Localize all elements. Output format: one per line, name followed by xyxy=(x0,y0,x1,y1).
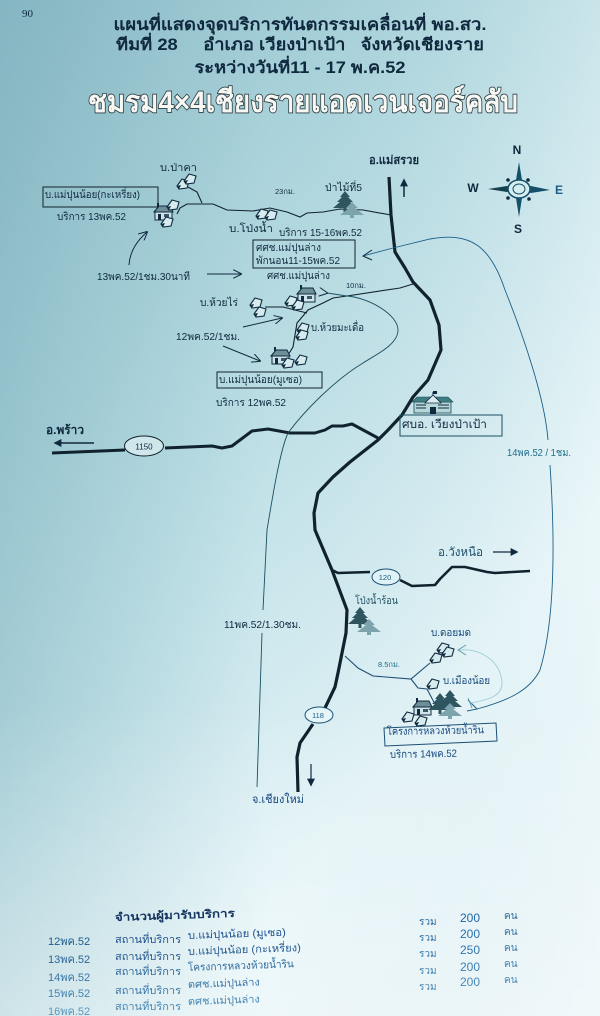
map labels: 12พค.52/1ชม. xyxy=(176,331,240,343)
road sign 1150: 1150 xyxy=(135,442,153,452)
route arrow to Mae Pun Lang xyxy=(207,273,241,275)
table service label: สถานที่บริการ xyxy=(115,983,181,997)
direction arrow east xyxy=(493,551,517,553)
map labels: อ.แม่สรวย xyxy=(369,153,419,167)
table unit: คน xyxy=(504,943,518,954)
table service places: ตศช.แม่ปุนล่าง xyxy=(188,993,260,1008)
table totals label: รวม xyxy=(419,949,437,960)
compass rose xyxy=(467,143,563,236)
title: ทีมที่ 28 อำเภอ เวียงป่าเป้า จังหวัดเชียงราย xyxy=(116,32,484,54)
table service places xyxy=(188,927,301,1008)
box: Mae Pun Noi Karen xyxy=(43,187,158,207)
map labels: 10กม. xyxy=(346,281,366,290)
box: Huay Nam Rin project xyxy=(384,723,497,746)
road 1150 xyxy=(52,424,378,453)
table totals values: 200 xyxy=(460,927,480,941)
icons: Huay Nam Rin project xyxy=(402,690,462,726)
icons: Huay Ma Duea village xyxy=(296,323,309,340)
compass rose: N xyxy=(513,143,521,157)
compass rose: S xyxy=(514,222,522,236)
icons: Doi Mot village xyxy=(430,643,454,663)
map labels: บ.แม่ปุนน้อย(มูเซอ) xyxy=(219,374,302,386)
map labels: อ.พร้าว xyxy=(46,423,84,437)
map labels: บ.โป่งน้ำ xyxy=(229,221,273,235)
map labels: ศบอ. เวียงป่าเป้า xyxy=(402,418,487,431)
table totals label xyxy=(419,917,437,993)
map labels: อ.วังหนือ xyxy=(438,545,483,559)
table unit: คน xyxy=(504,927,518,938)
route line 11 May xyxy=(257,293,398,787)
table totals label: รวม xyxy=(419,917,437,928)
compass rose: W xyxy=(467,181,479,195)
box: Wiang Pa Pao hospital xyxy=(400,415,502,436)
map labels: 14พค.52 / 1ชม. xyxy=(507,448,571,459)
table service places: บ.แม่ปุนน้อย (มูเซอ) xyxy=(188,927,286,942)
icons: Huay Rai village xyxy=(250,298,266,317)
table service label: สถานที่บริการ xyxy=(115,932,181,946)
southern feeder road xyxy=(345,656,437,708)
table totals values: 200 xyxy=(460,975,480,989)
title: แผนที่แสดงจุดบริการทันตกรรมเคลื่อนที่ พอ.สว. xyxy=(114,12,486,35)
map labels xyxy=(45,153,571,806)
road sign 120: 120 xyxy=(379,573,391,582)
route arrow to Muser village xyxy=(223,346,260,361)
road sign 118: 118 xyxy=(312,711,324,720)
map labels: บริการ 13พค.52 xyxy=(57,211,126,223)
table totals values: 250 xyxy=(460,943,480,957)
table dates: 15พค.52 xyxy=(48,988,90,1000)
direction arrow west xyxy=(55,442,94,444)
icon: Mueang Noi village xyxy=(427,679,439,689)
northern feeder road xyxy=(177,187,391,217)
table totals label: รวม xyxy=(419,982,437,993)
icons: Mae Pun Noi Muser village xyxy=(271,347,307,368)
table unit: คน xyxy=(504,975,518,986)
faint arrowheads xyxy=(458,645,472,708)
direction arrow south xyxy=(310,764,312,785)
road sign 1150 xyxy=(124,436,164,456)
table dates: 14พค.52 xyxy=(48,972,90,984)
table service places: บ.แม่ปุนน้อย (กะเหรี่ยง) xyxy=(188,940,301,958)
map labels: บ.ห้วยมะเดื่อ xyxy=(311,320,364,334)
table unit: คน xyxy=(504,959,518,970)
map labels: 8.5กม. xyxy=(378,660,400,669)
map labels: 11พค.52/1.30ชม. xyxy=(224,619,301,631)
page number: 90 xyxy=(22,8,34,20)
table totals values: 200 xyxy=(460,911,480,925)
map labels: ศศช.แม่ปุนล่าง xyxy=(256,242,321,254)
arrowhead at Huay Nam Rin xyxy=(467,700,477,711)
compass rose: E xyxy=(555,183,563,197)
route line 14 May xyxy=(363,237,553,709)
road sign 118 xyxy=(305,707,333,723)
main highway xyxy=(297,177,441,792)
map labels: บริการ 14พค.52 xyxy=(390,748,457,761)
table service places: ตศช.แม่ปุนล่าง xyxy=(188,976,260,991)
banner: club name: ชมรม4×4เชียงรายแอดเวนเจอร์คลับ xyxy=(88,85,518,119)
map labels: 23กม. xyxy=(275,187,295,196)
map labels: โครงการหลวงห้วยน้ำริน xyxy=(387,722,484,738)
map labels: ป่าไม้ที่5 xyxy=(325,180,362,194)
table totals label: รวม xyxy=(419,933,437,944)
map labels: โป่งน้ำร้อน xyxy=(355,593,398,607)
icon: hospital building xyxy=(412,391,453,414)
table service label: สถานที่บริการ xyxy=(115,999,181,1013)
route arrow to Karen village xyxy=(129,232,147,265)
table service label: สถานที่บริการ xyxy=(115,949,181,963)
route arrow to Huay Rai xyxy=(243,318,282,327)
map labels: บ.แม่ปุนน้อย(กะเหรี่ยง) xyxy=(45,187,140,201)
icons: Pong Nam village xyxy=(256,209,277,220)
arrowhead at Mae Pun Lang xyxy=(363,250,372,260)
icons: forestry unit 5 xyxy=(333,191,364,218)
map labels: บ.ดอยมด xyxy=(431,627,471,639)
road sign 120 xyxy=(372,569,400,585)
table dates: 13พค.52 xyxy=(48,954,90,966)
table service places: โครงการหลวงห้วยน้ำริน xyxy=(188,956,294,974)
title: ระหว่างวันที่11 - 17 พ.ค.52 xyxy=(194,55,406,77)
map labels: ศศช.แม่ปุนล่าง xyxy=(267,270,330,282)
service table xyxy=(48,907,518,1016)
map labels: พักนอน11-15พค.52 xyxy=(256,255,340,267)
icons: Pa Kha village xyxy=(177,174,196,189)
map labels: บ.ป่าคา xyxy=(160,162,197,174)
feeder road to Mae Pun xyxy=(265,284,413,355)
map labels: บ.เมืองน้อย xyxy=(443,674,490,687)
table service label: สถานที่บริการ xyxy=(115,964,181,978)
table totals label: รวม xyxy=(419,966,437,977)
map xyxy=(43,153,571,806)
title xyxy=(114,12,486,77)
map labels: บริการ 15-16พค.52 xyxy=(279,227,362,239)
table dates: 12พค.52 xyxy=(48,936,90,948)
box: Mae Pun Lang xyxy=(253,240,355,268)
table service label xyxy=(115,932,181,1013)
faint return route xyxy=(458,650,502,703)
icons: Mae Pun Noi Karen village xyxy=(154,200,179,227)
icons: Mae Pun Lang centre xyxy=(285,285,316,310)
direction arrow north xyxy=(403,180,405,197)
map labels: บริการ 12พค.52 xyxy=(216,397,286,409)
icon: Pong Nam Ron forest xyxy=(348,607,381,635)
map labels: จ.เชียงใหม่ xyxy=(252,793,304,806)
table unit: คน xyxy=(504,911,518,922)
map labels: บ.ห้วยไร่ xyxy=(200,296,238,309)
table heading: จำนวนผู้มารับบริการ xyxy=(115,907,235,925)
map labels: 13พค.52/1ชม.30นาที xyxy=(97,270,190,283)
table totals values xyxy=(460,911,480,989)
box: Mae Pun Noi Muser xyxy=(217,372,322,388)
table unit xyxy=(504,911,518,986)
table totals values: 200 xyxy=(460,960,480,974)
table dates xyxy=(48,936,90,1016)
road 120 xyxy=(332,567,530,586)
